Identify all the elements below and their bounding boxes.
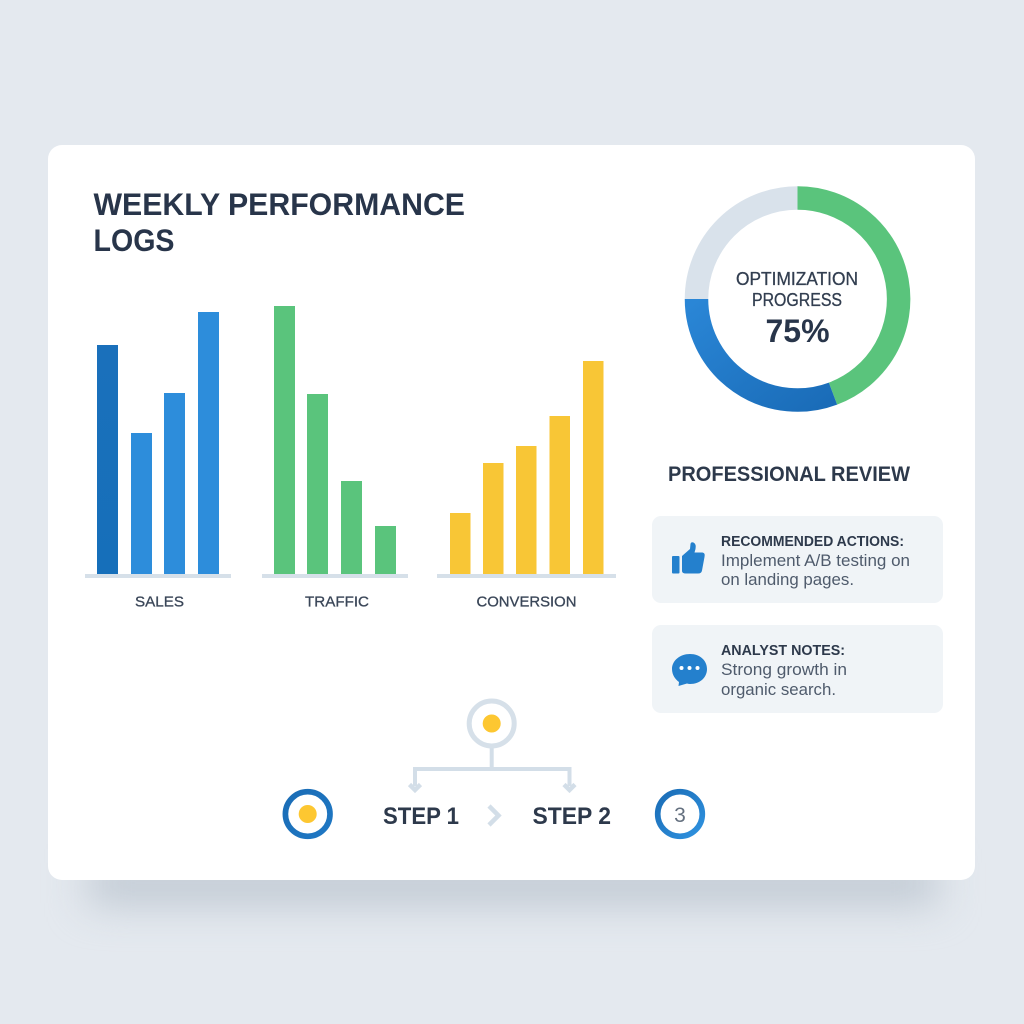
text: analyst notes [721,643,847,699]
donut label: OPTIMIZATION [736,269,858,289]
icon: thumbs up [672,542,705,574]
panel: recommended actions [652,516,943,603]
icon: step 3 node: 3 [674,804,686,827]
bar chart: conversion [437,361,616,610]
text: analyst notes: ANALYST NOTES: [721,643,845,659]
donut value: 75% [766,313,830,349]
icon: step 3 node [658,792,702,836]
label: conversion: CONVERSION [476,594,576,610]
bar chart: traffic [262,306,408,610]
donut chart: optimization progress: PROGRESS [752,290,842,310]
flow diagram connector [410,746,575,790]
title: WEEKLY PERFORMANCE [94,186,465,222]
text: recommended actions: RECOMMENDED ACTIONS: [721,534,904,550]
donut chart: optimization progress [696,198,899,400]
title [94,186,465,258]
text: recommended actions: Implement A/B testing on [721,552,910,570]
icon: chevron arrow [489,806,498,825]
icon: top node [469,701,514,746]
text: recommended actions [721,534,910,589]
label: step 2: STEP 2 [532,803,611,830]
text: analyst notes: Strong growth in [721,661,847,679]
text: recommended actions: on landing pages. [721,571,854,589]
text: analyst notes: organic search. [721,681,836,699]
title: LOGS [94,222,174,258]
heading: professional review: PROFESSIONAL REVIEW [668,463,910,486]
main card [48,145,975,880]
icon: speech bubble [672,654,707,686]
label: sales: SALES [135,594,184,610]
label: step 1: STEP 1 [383,803,459,830]
bar chart: sales [85,312,231,610]
icon: step start node [285,792,330,836]
panel: analyst notes [652,625,943,713]
label: traffic: TRAFFIC [305,594,369,610]
